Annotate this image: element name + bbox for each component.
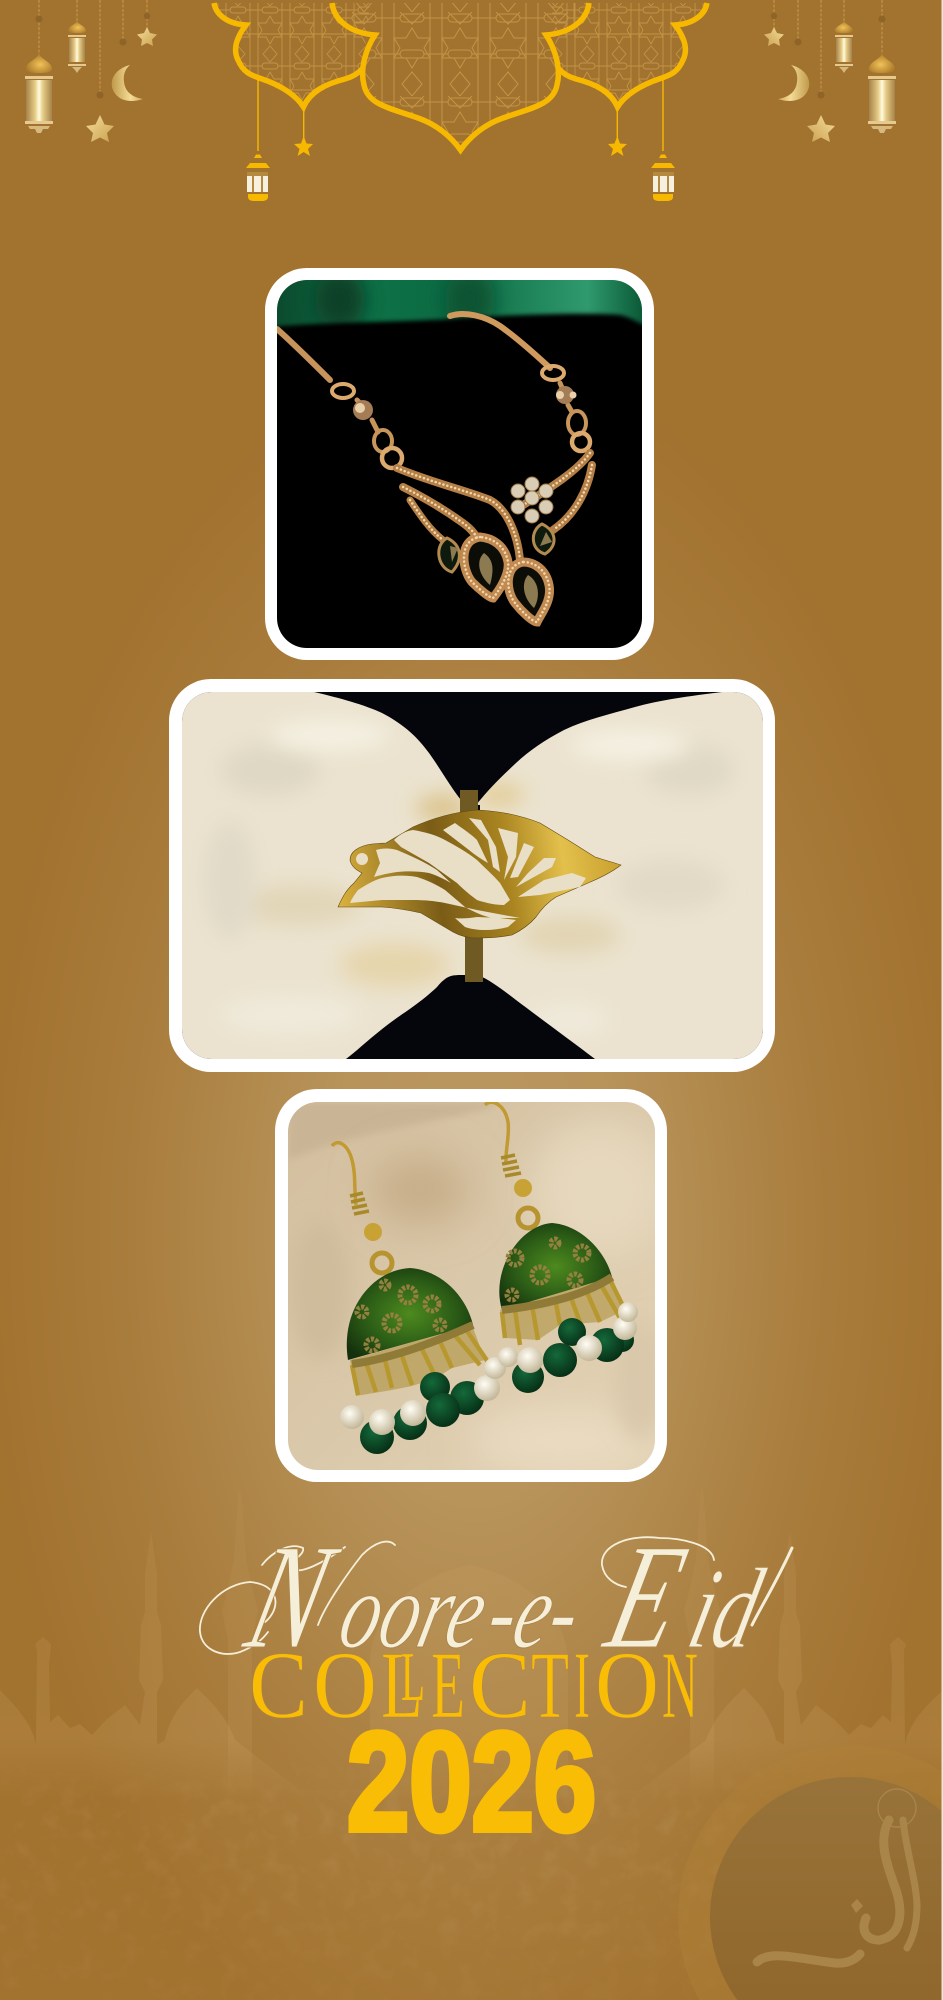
moon (112, 65, 143, 101)
badge ring (678, 1745, 943, 2000)
arch outlines (214, 3, 707, 150)
left corner lanterns, moon and stars (25, 0, 157, 142)
script flourishes (200, 1537, 792, 1654)
title: Noore-e-Eid: N (232, 1513, 352, 1680)
earring right (485, 1102, 638, 1393)
panel: necklace photo (265, 268, 654, 660)
arch pattern: geometric lattice (214, 3, 707, 153)
hanging lanterns and stars (246, 79, 675, 201)
title: Noore-e-Eid: id (678, 1546, 774, 1673)
title: 2026: 2026 (347, 1703, 596, 1860)
title: Noore-e-Eid: -e- (477, 1550, 594, 1671)
panel: green jhumka earrings photo (275, 1089, 670, 1482)
top arch ornament (214, 3, 707, 201)
flower (511, 477, 553, 523)
speckled ground texture (392, 1809, 393, 1810)
title: COLLECTION (249, 1632, 698, 1738)
small lantern right (835, 21, 853, 73)
title: COLLECTION: L (401, 1639, 425, 1716)
right edge strip (942, 0, 943, 2000)
title: Noore-e-Eid: E (591, 1513, 701, 1680)
small star right (764, 27, 784, 46)
title: COLLECTION: N (662, 1632, 698, 1738)
mosque silhouette (0, 1488, 943, 1800)
right corner lanterns, moon and stars (764, 0, 896, 142)
leaf ring (338, 810, 621, 938)
necklace (277, 314, 592, 622)
icon: calligraphy mark (757, 1789, 917, 1963)
big star right (807, 115, 835, 142)
title: COLLECTION: C (249, 1632, 308, 1738)
big lantern (25, 54, 53, 133)
title: COLLECTION: C (469, 1632, 531, 1738)
small lantern (68, 21, 86, 73)
title: Noore-e-Eid (200, 1513, 792, 1680)
earring left (332, 1143, 518, 1454)
big lantern right (868, 54, 896, 133)
small star (137, 27, 157, 46)
title: COLLECTION: I (574, 1632, 590, 1738)
panel: ring on satin photo (169, 679, 775, 1072)
title: COLLECTION: T (531, 1632, 569, 1738)
title: COLLECTION: O (313, 1632, 377, 1738)
big star (86, 115, 114, 142)
title: COLLECTION: E (431, 1632, 465, 1738)
moon right (778, 65, 809, 101)
logo badge (678, 1745, 943, 2000)
title: COLLECTION: L (381, 1632, 423, 1738)
title: Noore-e-Eid: oore (329, 1550, 500, 1671)
badge disc (710, 1777, 943, 2000)
title: COLLECTION: O (595, 1632, 659, 1738)
